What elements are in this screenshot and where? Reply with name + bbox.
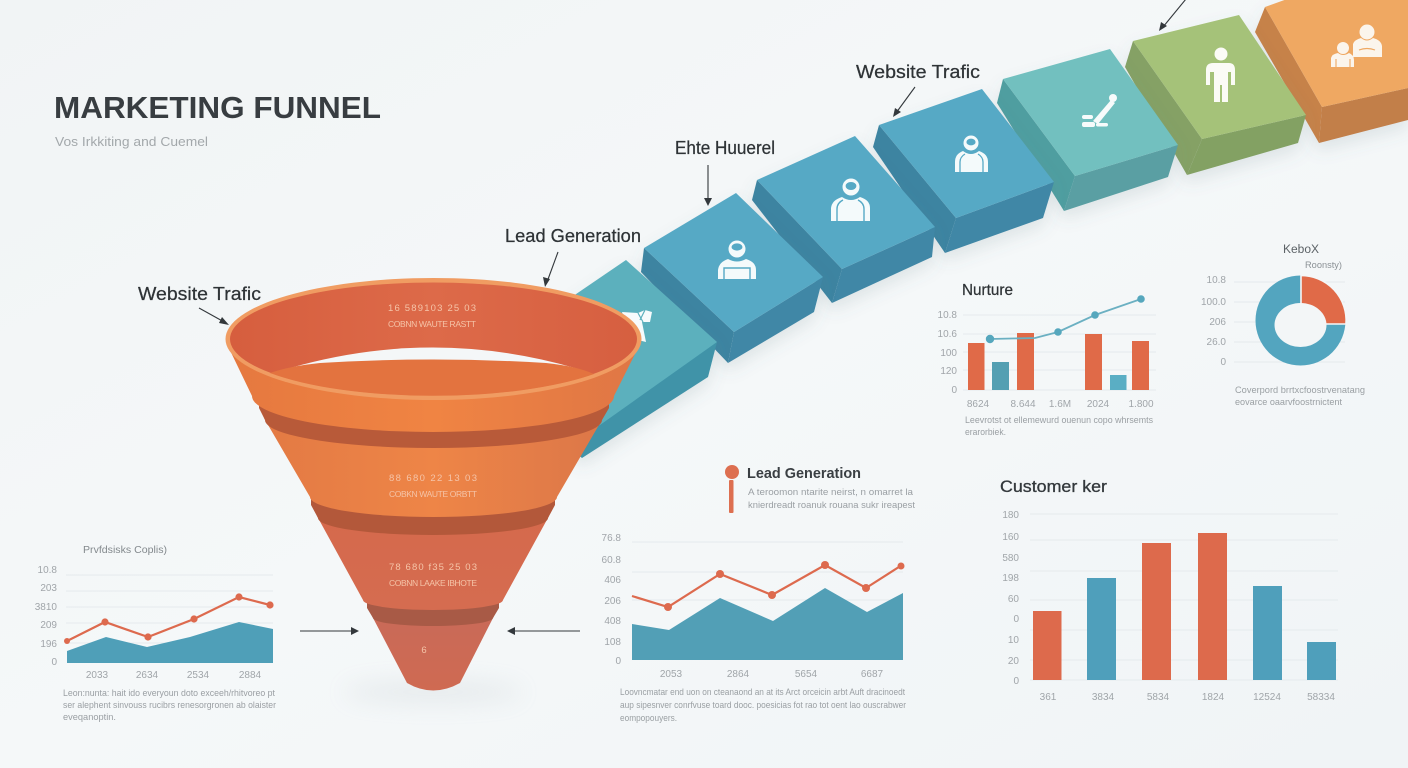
- funnel tier 3: [317, 516, 549, 610]
- icon: person: [718, 240, 756, 279]
- funnel text tier 2: COBKN WAUTE ORBTT: [389, 489, 477, 499]
- chart note: eompopouyers.: [620, 713, 677, 724]
- chart note: [965, 415, 1153, 438]
- donut chart: [1256, 275, 1346, 366]
- arrow: lead generation: [543, 252, 558, 287]
- grid lines and y axis: 0: [951, 385, 957, 396]
- grid lines and y axis: 206: [604, 596, 621, 607]
- funnel ground shadow: [343, 681, 523, 703]
- grid lines and y axis: 100: [940, 348, 957, 359]
- icon: two people: [1331, 24, 1382, 67]
- grid lines and y axis: [1002, 510, 1338, 687]
- arrow: website traffic top: [893, 87, 915, 117]
- grid lines and y axis: 0: [615, 656, 621, 667]
- block 6: green: [1125, 15, 1306, 175]
- arrow: ehte huuerel: [704, 165, 712, 206]
- x axis labels: 8.644: [1010, 399, 1036, 410]
- grid lines and y axis: 203: [40, 583, 57, 594]
- x axis labels: 1.6M: [1049, 399, 1071, 410]
- grid lines and y axis: 206: [1209, 317, 1226, 328]
- funnel interior wall: [230, 282, 637, 396]
- funnel tier 4: [372, 616, 494, 690]
- grid lines and y axis: 0: [1220, 357, 1226, 368]
- chart note: erarorbiek.: [965, 427, 1006, 438]
- chart heading: Roonsty): [1305, 260, 1342, 271]
- grid lines and y axis: 160: [1002, 532, 1019, 543]
- block 3: blue: [752, 136, 935, 303]
- chart note: ser alephent sinvouss rucibrs renesorgronen ab olaister: [63, 700, 276, 711]
- x axis labels: 2053: [660, 669, 683, 680]
- area series: [632, 588, 903, 660]
- chart note: [63, 688, 276, 723]
- line series: [986, 295, 1145, 343]
- x axis labels: 5834: [1147, 692, 1170, 703]
- funnel text tier 4: 6: [421, 645, 427, 656]
- grid lines and y axis: 408: [604, 616, 621, 627]
- chart heading: [1283, 244, 1342, 271]
- funnel text tier 1: COBNN WAUTE RASTT: [388, 319, 476, 329]
- grid lines and y axis: 580: [1002, 553, 1019, 564]
- x axis labels: 3834: [1092, 692, 1115, 703]
- chart panel: bottom-left area and line: [35, 544, 276, 723]
- x axis labels: 8624: [967, 399, 990, 410]
- callout text: [748, 487, 915, 511]
- grid lines and y axis: 406: [604, 575, 621, 586]
- grid lines and y axis: 0: [51, 657, 57, 668]
- chart heading: KeboX: [1283, 244, 1319, 256]
- chart panel: customer bars: [1000, 478, 1338, 703]
- x axis labels: 2024: [1087, 399, 1110, 410]
- grid lines and y axis: [602, 533, 903, 667]
- chart note: eovarce oaarvfoostrnictent: [1235, 397, 1342, 408]
- chart panel: donut: [1201, 244, 1365, 408]
- icon: person: [831, 178, 870, 221]
- grid lines and y axis: 180: [1002, 510, 1019, 521]
- grid lines and y axis: 60.8: [602, 555, 621, 566]
- grid lines and y axis: 10.8: [38, 565, 57, 576]
- grid lines and y axis: [35, 565, 273, 668]
- subtitle: Vos Irkkiting and Cuemel: [55, 134, 208, 149]
- block 2: blue: [641, 193, 823, 363]
- icon: standing person: [1206, 48, 1235, 102]
- arrow: to funnel left: [300, 627, 359, 635]
- funnel text tier 3: 78 680 f35 25 03: [389, 562, 477, 573]
- icon: tool: [1082, 94, 1117, 127]
- funnel: [226, 278, 642, 703]
- funnel rim: [226, 278, 642, 400]
- x axis labels: 58334: [1307, 692, 1335, 703]
- block 1: teal, behind funnel: [560, 260, 717, 458]
- bars: [1033, 533, 1336, 680]
- grid lines and y axis: 10: [1008, 635, 1019, 646]
- funnel band 3: [367, 596, 499, 626]
- grid lines and y axis: 198: [1002, 573, 1019, 584]
- arrow: website traffic left: [199, 308, 229, 325]
- staircase of funnel stage blocks: [560, 0, 1408, 458]
- grid lines and y axis: 60: [1008, 594, 1019, 605]
- chart panel: lead generation: [602, 465, 915, 724]
- chart note: Coverpord brrtxcfoostrvenatang: [1235, 385, 1365, 396]
- label: website traffic left: Website Trafic: [138, 283, 261, 304]
- line series: [632, 561, 904, 611]
- chart note: eveqanoptin.: [63, 712, 116, 723]
- grid lines and y axis: 76.8: [602, 533, 621, 544]
- x axis labels: 2534: [187, 670, 210, 681]
- funnel text tier 3: COBNN LAAKE IBHOTE: [389, 578, 477, 588]
- x axis labels: 361: [1040, 692, 1057, 703]
- chart note: Loovncmatar end uon on cteanaond an at its Arct orceicin arbt Auft dracinoedt: [620, 687, 905, 698]
- x axis labels: 2033: [86, 670, 109, 681]
- grid lines and y axis: 209: [40, 620, 57, 631]
- x axis labels: [660, 669, 884, 680]
- grid lines and y axis: 20: [1008, 656, 1019, 667]
- funnel interior front surface: [270, 360, 594, 396]
- callout marker: [725, 465, 739, 513]
- funnel band 1: [259, 398, 609, 448]
- label: ehte huuerel: Ehte Huuerel: [675, 137, 775, 158]
- funnel tier 1 outer: [226, 342, 641, 432]
- callout text: A teroomon ntarite neirst, n omarret la: [748, 487, 914, 498]
- grid lines and y axis: [1201, 275, 1345, 368]
- x axis labels: [967, 399, 1154, 410]
- bars: [968, 333, 1149, 390]
- x axis labels: 2884: [239, 670, 262, 681]
- chart heading: Prvfdsisks Coplis): [83, 544, 167, 556]
- chart note: [1235, 385, 1365, 408]
- grid lines and y axis: [938, 310, 1156, 396]
- chart note: Leon:nunta: hait ido everyoun doto exceeh/rhitvoreo pt: [63, 688, 275, 699]
- grid lines and y axis: 10.6: [938, 329, 957, 340]
- funnel text tier 2: 88 680 22 13 03: [389, 473, 477, 484]
- callout text: knierdreadt roanuk rouana sukr ireapest: [748, 500, 915, 511]
- block 5: teal: [997, 49, 1178, 211]
- x axis labels: 12524: [1253, 692, 1281, 703]
- chart heading: Customer ker: [1000, 478, 1108, 496]
- grid lines and y axis: 0: [1013, 676, 1019, 687]
- x axis labels: [1040, 692, 1335, 703]
- chart note: Leevrotst ot ellemewurd ouenun copo whrsemts: [965, 415, 1153, 426]
- funnel band 2: [311, 490, 555, 535]
- x axis labels: 2864: [727, 669, 750, 680]
- label: lead generation: Lead Generation: [505, 225, 641, 246]
- x axis labels: 5654: [795, 669, 818, 680]
- chart heading: Nurture: [962, 282, 1013, 299]
- arrow: to funnel right: [507, 627, 580, 635]
- chart note: aup sipesnver conrfvuse toard dooc. poesicias fot rao tot oent lao ouscrabwer: [620, 700, 906, 711]
- icon: person: [955, 136, 988, 172]
- funnel text tier 3: [389, 562, 477, 588]
- grid lines and y axis: 108: [604, 637, 621, 648]
- chart heading: Lead Generation: [747, 465, 861, 482]
- funnel text tier 2: [389, 473, 477, 499]
- x axis labels: 1824: [1202, 692, 1225, 703]
- x axis labels: 2634: [136, 670, 159, 681]
- chart note: [620, 687, 906, 724]
- x axis labels: [86, 670, 262, 681]
- block 7: orange: [1255, 0, 1408, 143]
- grid lines and y axis: 26.0: [1207, 337, 1226, 348]
- grid lines and y axis: 3810: [35, 602, 57, 613]
- funnel text tier 1: [388, 303, 476, 329]
- grid lines and y axis: 10.8: [1207, 275, 1226, 286]
- area series: [67, 622, 273, 663]
- block 4: blue: [873, 89, 1054, 253]
- x axis labels: 6687: [861, 669, 884, 680]
- label: website traffic top: Website Trafic: [856, 61, 980, 82]
- arrow: top right: [1159, 0, 1186, 31]
- grid lines and y axis: 196: [40, 639, 57, 650]
- funnel tier 2: [264, 418, 603, 517]
- funnel opening: [290, 348, 575, 368]
- x axis labels: 1.800: [1128, 399, 1154, 410]
- line series: [64, 593, 274, 644]
- icon: partly hidden: [622, 310, 652, 342]
- grid lines and y axis: 10.8: [938, 310, 957, 321]
- grid lines and y axis: 120: [940, 366, 957, 377]
- title: MARKETING FUNNEL: [54, 90, 381, 125]
- chart panel: nurture: [938, 282, 1156, 438]
- grid lines and y axis: 0: [1013, 614, 1019, 625]
- funnel text tier 1: 16 589103 25 03: [388, 303, 476, 314]
- grid lines and y axis: 100.0: [1201, 297, 1226, 308]
